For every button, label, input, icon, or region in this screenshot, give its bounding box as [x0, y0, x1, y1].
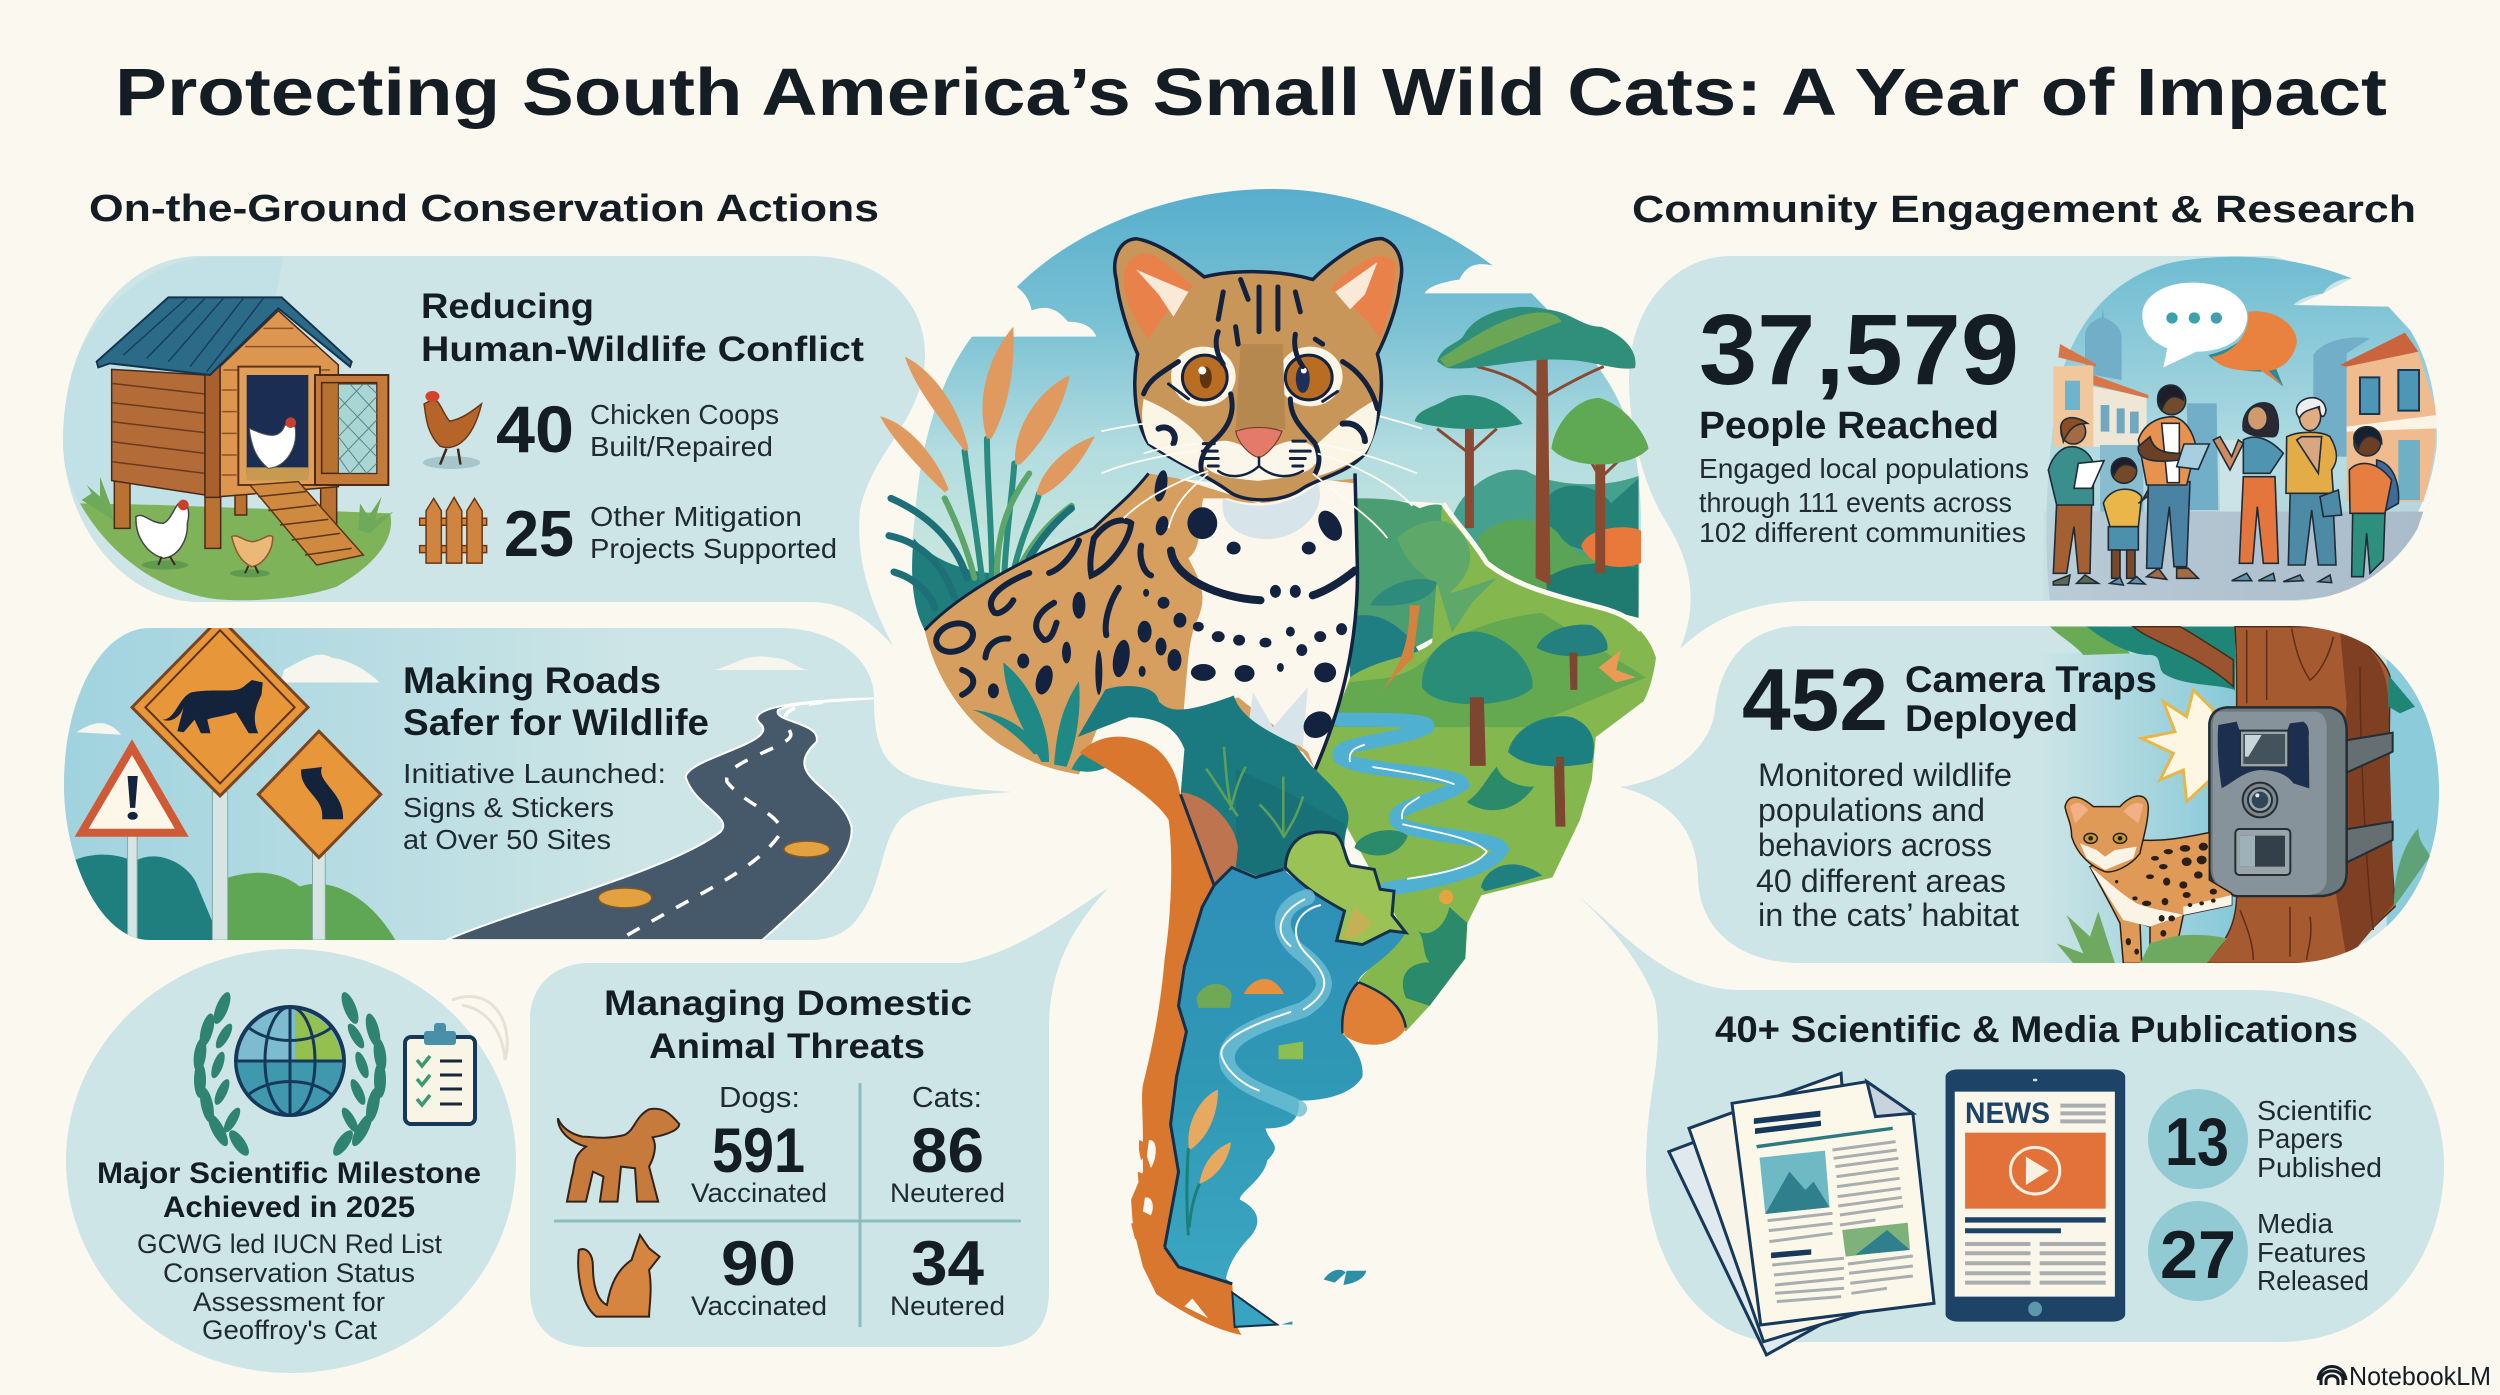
stat: 40 chicken coops [496, 392, 779, 466]
text block: Signs & Stickers [403, 792, 614, 823]
text block [403, 758, 666, 855]
text block: Engaged local populations [1699, 453, 2029, 484]
stat: 452 camera traps: 452 [1742, 650, 1888, 749]
stat: 13 papers [2148, 1089, 2382, 1189]
heading: community and research: Community Engagement & Research [1632, 189, 2416, 231]
heading [97, 1157, 481, 1224]
text block: Initiative Launched: [403, 758, 666, 789]
panel: camera traps [1620, 626, 2453, 963]
text block [1699, 453, 2029, 548]
stat column: dogs neutered: Cats: [912, 1082, 982, 1114]
heading: Achieved in 2025 [163, 1191, 415, 1224]
panel: publications [1578, 896, 2444, 1355]
illustration: community group [2043, 253, 2463, 603]
heading: 40+ Scientific & Media Publications [1715, 1009, 2358, 1050]
text block: Monitored wildlife [1758, 757, 2012, 793]
stat: 13 papers: Scientific [2257, 1095, 2372, 1126]
illustration: chicken coop [60, 257, 393, 600]
text block: 40 different areas [1756, 863, 2006, 899]
text block: Conservation Status [163, 1258, 415, 1288]
green lowlands [1315, 503, 1656, 1032]
stat: people reached: People Reached [1699, 405, 1999, 447]
panel heading [421, 287, 864, 369]
stat row: cats neutered: 34 [911, 1229, 984, 1299]
stat row: cats neutered: Neutered [890, 1291, 1005, 1321]
icon: hen [423, 391, 482, 469]
stat: 452 camera traps: Camera Traps [1905, 659, 2157, 700]
stat: 25 other projects: Projects Supported [590, 533, 837, 564]
stat column: dogs [691, 1082, 827, 1208]
heading: Animal Threats [649, 1027, 925, 1066]
text block: GCWG led IUCN Red List [137, 1229, 442, 1259]
panel: reducing human-wildlife conflict [60, 256, 925, 646]
text block: Geoffroy's Cat [202, 1315, 378, 1345]
southern South America: regions [1078, 686, 1594, 1335]
stat column: dogs neutered: 86 [911, 1116, 984, 1186]
text block: behaviors across [1758, 827, 1992, 863]
text block: at Over 50 Sites [403, 824, 611, 855]
text block: populations and [1758, 792, 1985, 828]
text block: through 111 events across [1699, 487, 2012, 518]
panel: scientific milestone [66, 949, 516, 1373]
heading: Managing Domestic [604, 984, 972, 1023]
stat column: dogs neutered [890, 1082, 1005, 1208]
panel heading: Safer for Wildlife [403, 702, 709, 743]
stat: people reached [1699, 294, 2019, 447]
stat: 40 chicken coops: Chicken Coops [590, 399, 779, 430]
forest hills and trees [1350, 307, 1648, 682]
tablet label: NEWS [1965, 1097, 2050, 1130]
panel heading: Human-Wildlife Conflict [421, 330, 864, 369]
heading [604, 984, 972, 1066]
illustration: road signs and road [64, 618, 874, 940]
stat: 27 media features: 27 [2160, 1217, 2236, 1293]
icon: clipboard [405, 1023, 475, 1124]
icon: fence [420, 497, 487, 563]
stat: 25 other projects: Other Mitigation [590, 501, 802, 532]
stat: 27 media features [2148, 1201, 2369, 1301]
icon: cat [578, 1235, 660, 1317]
left grasses and plumes [880, 327, 1095, 630]
text block: Assessment for [193, 1287, 385, 1317]
text block [1756, 757, 2019, 933]
central map: cat and South America [880, 189, 1656, 1335]
stat: 452 camera traps [1742, 650, 2157, 749]
panel heading: Reducing [421, 287, 594, 326]
icon: globe with laurel [192, 990, 388, 1159]
text block: 102 different communities [1699, 517, 2026, 548]
sky and clouds [912, 189, 1641, 630]
heading: on-the-ground actions: On-the-Ground Conservation Actions [89, 188, 879, 230]
text block [137, 1229, 442, 1345]
main cat illustration [925, 239, 1422, 774]
panel heading [403, 660, 709, 743]
panel: people reached [1629, 253, 2463, 649]
illustration: news tablet [1946, 1069, 2125, 1322]
stat: 25 other projects [504, 497, 837, 570]
stat: 25 other projects: 25 [504, 497, 574, 570]
stat column: dogs: Vaccinated [691, 1178, 827, 1208]
stat: 27 media features: Features [2257, 1237, 2366, 1268]
stat: 27 media features: Media [2257, 1208, 2333, 1239]
panel: making roads safer [64, 618, 1012, 940]
stat: 13 papers: 13 [2165, 1104, 2229, 1180]
stat column: dogs: Dogs: [719, 1082, 800, 1114]
title: Protecting South America’s Small Wild Cats: A Year of Impact [115, 55, 2387, 130]
panel: managing domestic animal threats [530, 888, 1108, 1347]
stat row: cats neutered [890, 1229, 1005, 1321]
icon: dog [558, 1109, 679, 1202]
foreground leaves [972, 662, 1119, 772]
illustration: newspapers [1669, 1073, 1934, 1355]
stat: 40 chicken coops: Built/Repaired [590, 431, 773, 462]
stat column: dogs neutered: Neutered [890, 1178, 1005, 1208]
stat: 27 media features: Released [2257, 1265, 2369, 1296]
text block: in the cats’ habitat [1758, 897, 2019, 933]
illustration: camera trap on tree [2040, 627, 2453, 963]
stat: 452 camera traps: Deployed [1905, 698, 2078, 739]
NotebookLM mark: NotebookLM [2349, 1361, 2491, 1391]
panel heading: Making Roads [403, 660, 661, 701]
stat row: cats vaccinated: 90 [721, 1229, 796, 1299]
stat row: cats vaccinated: Vaccinated [691, 1291, 827, 1321]
stat: 13 papers: Papers [2257, 1123, 2343, 1154]
stat: 40 chicken coops: 40 [496, 392, 574, 466]
stat: people reached: 37,579 [1699, 294, 2019, 406]
stat row: cats vaccinated [691, 1229, 827, 1321]
heading: Major Scientific Milestone [97, 1157, 481, 1190]
stat: 13 papers: Published [2257, 1152, 2382, 1183]
stat column: dogs: 591 [712, 1116, 805, 1186]
